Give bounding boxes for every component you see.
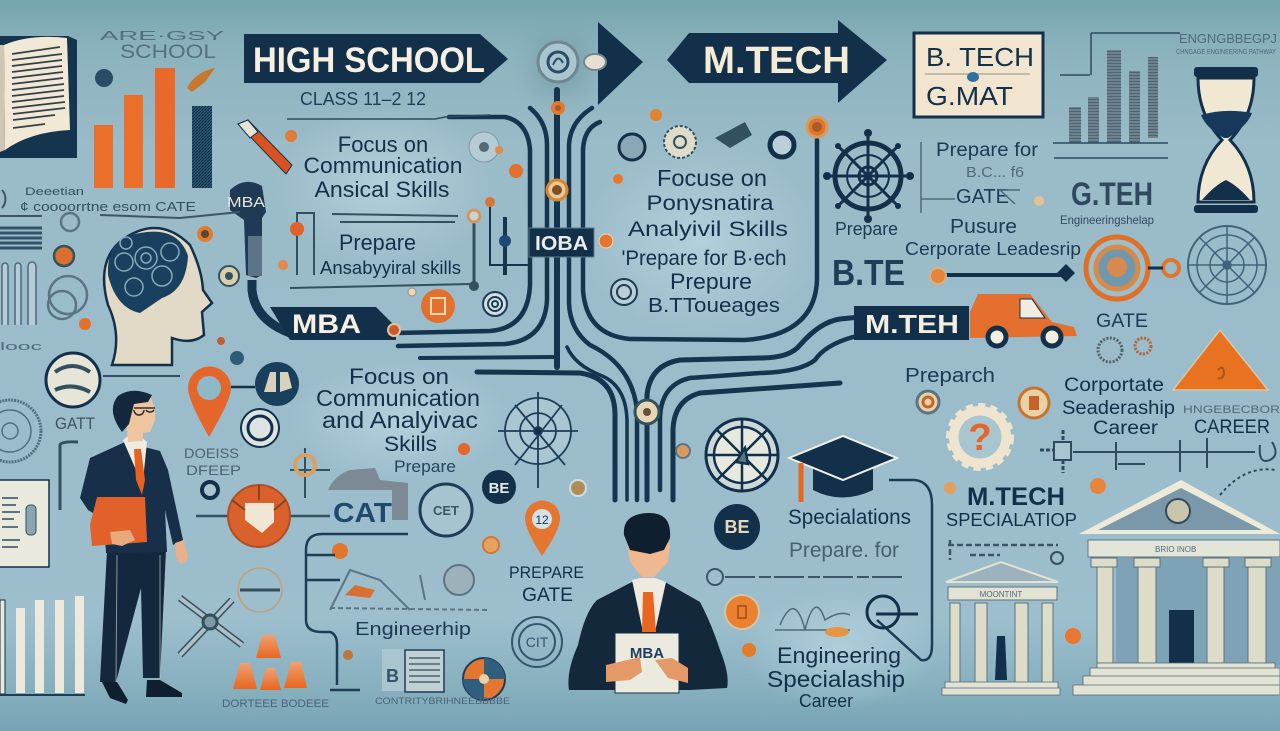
icon: blob MBA tag: MBA	[227, 194, 265, 211]
text block: focus on communication lower: Skills	[384, 433, 437, 456]
icon: cream circle emblem	[46, 353, 100, 407]
chart: left striped block: looc	[0, 341, 43, 353]
heading banner: M.Tech arrow: M.TECH	[703, 40, 850, 82]
bracket: prepare	[921, 142, 1020, 213]
bar chart: cream bars	[0, 596, 85, 695]
text block: corporate leadership career: CAREER	[1194, 417, 1270, 438]
icon: radar wheel	[1188, 226, 1266, 304]
connector: line to head	[103, 375, 180, 377]
label: business degree: DFEEP	[186, 462, 241, 478]
icon: sketch knot	[1098, 338, 1151, 362]
text block: corporate leadership career: HNGEBECBOR	[1183, 404, 1280, 416]
bracket: prepare frame	[290, 210, 480, 290]
person: man in suit with folder	[80, 391, 188, 704]
rule under class	[287, 115, 490, 119]
bar chart: orange bars	[94, 68, 212, 188]
label: G.TEH	[1060, 176, 1154, 227]
text block: focus on communication lower: Prepare	[394, 457, 456, 476]
heading: M.Tech specialization	[946, 483, 1077, 530]
label box: IOBA	[529, 228, 594, 257]
icon: orange cracked medallion	[196, 485, 330, 547]
text block: focus on communication lower: Focus on	[349, 364, 449, 389]
icon: gear with question mark	[949, 406, 1011, 468]
sketch: left cluster of marks	[0, 190, 240, 218]
text block: prepare for gate	[936, 140, 1039, 208]
label: gate: GATE	[1096, 311, 1148, 332]
icon: small orange pin: 12	[535, 513, 549, 527]
heading: school label	[100, 28, 225, 63]
text block: focus on physical skills: Focuse on	[657, 165, 767, 191]
sketch: scribble	[948, 540, 1058, 560]
captions: bottom small print: DORTEEE BODEEE	[222, 698, 329, 710]
heading: school label: SCHOOL	[120, 42, 216, 63]
icon: CET seal	[512, 617, 562, 667]
label: engineership: Engineerhip	[355, 619, 471, 639]
icon: pen	[238, 120, 292, 174]
central track lines	[396, 90, 860, 500]
card: B document: B	[386, 666, 399, 686]
label box: IOBA: IOBA	[535, 233, 588, 255]
icon: ring node	[917, 391, 939, 413]
icon: orange triangle	[1173, 330, 1268, 390]
text block: corporate leadership career: Corportate	[1064, 375, 1164, 396]
text block: focus on communication: Focus on	[338, 132, 428, 157]
icon: compass target	[498, 392, 578, 488]
icons: small emblem row	[619, 117, 827, 160]
icon: small ring	[202, 482, 218, 498]
text block: focus on physical skills: Ponysnatira	[646, 192, 774, 215]
heading banner: M.Tech arrow	[667, 20, 887, 103]
icon: graduation cap	[789, 436, 897, 502]
text block: engineering specialaship career: Specialaship	[767, 666, 905, 692]
icon: navy circle	[231, 362, 299, 406]
node: cream dot	[1034, 196, 1044, 206]
connector: bracket lower	[306, 534, 408, 690]
heading: M.Tech specialization: M.TECH	[967, 483, 1065, 511]
node: orange connector	[388, 324, 400, 336]
text block: prepare gate: PREPARE	[509, 563, 584, 582]
icon: small temple: MOONTINT	[980, 590, 1022, 599]
label: engineering header	[1176, 31, 1277, 56]
icon: large temple: BRIO INOB	[1155, 545, 1196, 554]
text block: engineering specialaship career: Engineering	[777, 643, 901, 668]
label: engineering header: ENGNGBBEGPJ	[1179, 31, 1277, 46]
text block: corporate leadership career: Seaderaship	[1062, 398, 1175, 419]
text block: focus on physical skills: B.TToueages	[648, 295, 780, 317]
icon: small orange pin	[525, 500, 560, 556]
icon: orange target	[1086, 237, 1179, 299]
text block: specializations prepare for: Prepare. for	[789, 539, 899, 562]
text block: specializations prepare for: Specialations	[788, 506, 911, 529]
heading: M.Tech specialization: SPECIALATIOP	[946, 510, 1077, 530]
text block: pursue corporate leadership	[905, 216, 1081, 259]
banner: MBA	[270, 307, 396, 340]
icon: ring magnifier	[867, 596, 918, 628]
icon: orange map pin	[188, 366, 231, 437]
text block: pursue corporate leadership: Pusure	[950, 216, 1017, 238]
icon: CET ring	[420, 484, 472, 536]
chart: left striped block	[0, 228, 43, 353]
text block: engineering specialaship career: Career	[799, 691, 853, 711]
icon: orange van	[970, 294, 1077, 346]
icon: wheel compass	[706, 419, 778, 491]
card: B.Tech and G.MAT: B. TECH	[926, 42, 1034, 72]
label: GATT: GATT	[55, 414, 95, 433]
person: graduate holding MBA sheet: MBA	[630, 645, 664, 662]
label: M.TEH	[854, 306, 969, 340]
icon: small temple	[942, 562, 1060, 695]
node: orange dots	[635, 400, 1106, 657]
card: document left	[0, 480, 49, 567]
sketch: mixed marks	[238, 565, 490, 612]
text block: dedication caption: Deeetian	[25, 186, 84, 198]
icon: CET ring: CET	[433, 503, 459, 518]
icon: head with brain	[104, 228, 212, 365]
connector: bracket near person	[60, 442, 78, 510]
card: B.Tech and G.MAT	[914, 33, 1043, 117]
heading banner: High School: HIGH SCHOOL	[253, 41, 485, 80]
icon: double ring	[241, 409, 279, 447]
arrow: large navy arrow head	[598, 22, 643, 105]
label: business degree	[184, 445, 241, 478]
text block: pursue corporate leadership: Cerporate Leadesrip	[905, 239, 1081, 259]
text block: prepare gate: GATE	[522, 585, 573, 606]
subheading: class: CLASS 11–2 12	[300, 89, 426, 109]
label: business degree: DOEISS	[184, 445, 239, 461]
icon: orange torch	[290, 448, 330, 498]
text block: specializations prepare for	[788, 506, 911, 562]
icons: small knots beside head	[48, 213, 87, 319]
text block: focus on communication	[304, 132, 462, 202]
badge: BE: BE	[724, 517, 750, 537]
text block: prepare for gate: B.C... f6	[966, 164, 1024, 181]
text block: dedication caption: ¢ coooorrtne esom CATE	[20, 199, 196, 214]
icons: orange cones	[233, 635, 307, 690]
icon: grey wheel left	[0, 400, 41, 462]
text block: prepare: Ansabyyiral skills	[320, 258, 461, 278]
badge: BE small: BE	[489, 480, 509, 497]
text block: prepare for gate: Prepare for	[936, 140, 1039, 161]
label: G.TEH: G.TEH	[1071, 176, 1153, 212]
sketch: engineering scribble	[775, 607, 850, 637]
card: B document	[382, 649, 444, 692]
icon: small medallion	[1019, 388, 1049, 418]
icon: open book	[0, 36, 77, 158]
label: B.TE: B.TE	[832, 252, 905, 293]
node: orange drop	[458, 443, 470, 455]
node: orange ring	[332, 537, 499, 660]
icon: crossed tools	[180, 598, 242, 655]
label: CAT	[328, 468, 408, 528]
text block: prepare: Prepare	[339, 230, 416, 255]
icon: large temple	[1073, 480, 1280, 695]
badge: BE small	[482, 470, 516, 504]
badge: BE	[714, 504, 760, 550]
marker: navy pin and bracket	[469, 132, 528, 275]
icon: fingerprint badge	[611, 279, 637, 305]
bar chart: grey hatched	[1053, 33, 1180, 158]
icon: eye spiral	[538, 42, 606, 82]
text block: dedication caption	[20, 186, 196, 214]
text block: focus on physical skills: Prepure	[670, 269, 752, 294]
text block: focus on communication lower	[316, 364, 480, 476]
bracket: right curve	[877, 480, 932, 660]
icon: gear with question mark: ?	[968, 417, 992, 459]
text block: focus on communication lower: and Analyivac	[322, 407, 478, 433]
icon: concentric ring	[483, 292, 507, 316]
text block: prepare	[320, 230, 461, 278]
icon: hourglass	[1194, 67, 1258, 213]
label: M.TEH: M.TEH	[865, 309, 959, 339]
text block: focus on physical skills: Analyivil Skills	[628, 218, 788, 241]
captions: bottom small print: CONTRITYBRIHNEEBBBBE	[375, 696, 510, 706]
sketch: horizontal rule	[707, 569, 905, 585]
text block: prepare gate	[509, 563, 584, 606]
icon: blob MBA tag	[227, 182, 266, 278]
text block: corporate leadership career: Career	[1093, 418, 1159, 439]
heading: school label: ARE·GSY	[100, 28, 225, 43]
track: MBA connector	[252, 280, 290, 333]
icon: ship wheel	[823, 129, 914, 223]
icon: top smudges	[95, 68, 215, 92]
label: preparch: Preparch	[905, 365, 995, 387]
connector: career line	[1040, 430, 1276, 495]
icon: orange badge	[725, 595, 759, 629]
label: CAT: CAT	[333, 497, 392, 528]
text block: focus on physical skills: 'Prepare for B·ech	[622, 247, 786, 270]
person: graduate holding MBA sheet	[568, 513, 728, 693]
text block: focus on communication: Ansical Skills	[314, 177, 450, 202]
label: G.TEH: Engineeringshelap	[1060, 213, 1154, 227]
captions: bottom small print	[222, 696, 510, 710]
icon: orange and navy disc	[463, 658, 505, 700]
connector: dot line	[930, 264, 1075, 284]
nodes: track markers	[79, 101, 662, 365]
text block: prepare for gate: GATE	[956, 186, 1009, 208]
text block: focus on physical skills	[622, 165, 788, 317]
node: small grey ring	[570, 480, 586, 496]
card: B.Tech and G.MAT: G.MAT	[926, 81, 1013, 111]
text block: focus on communication: Communication	[304, 153, 462, 178]
text block: corporate leadership career	[1062, 375, 1280, 439]
text block: focus on communication lower: Communication	[316, 385, 480, 411]
icon: CET seal: CIT	[526, 634, 549, 650]
label: prepare: Prepare	[835, 219, 898, 239]
banner: MBA: MBA	[292, 309, 361, 339]
icon: orange badge	[421, 289, 455, 323]
text block: engineering specialaship career	[767, 643, 905, 711]
